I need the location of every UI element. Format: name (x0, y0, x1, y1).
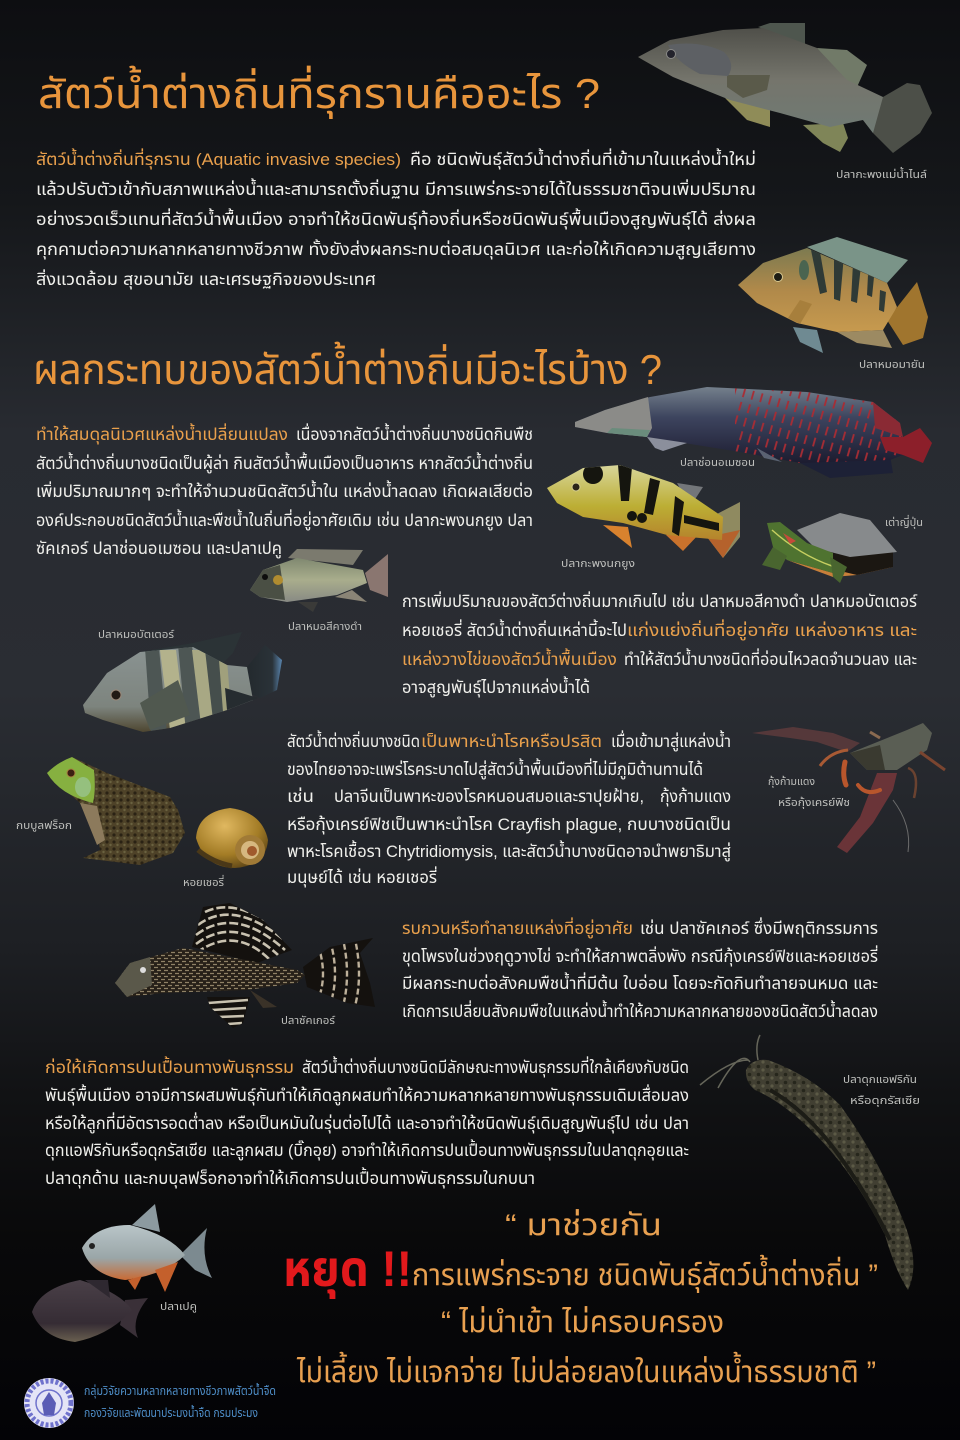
text block: disease carriers: เช่น (287, 788, 314, 806)
label: peacock bass: ปลากะพงนกยูง (561, 558, 635, 570)
icon: crayfish (752, 723, 945, 853)
title: what are invasive aquatic animals: สัตว์น้ำต่างถิ่นที่รุกรานคืออะไร ? (38, 65, 600, 119)
icon: arapaima (575, 387, 932, 478)
label: bullfrog: กบบูลฟร็อก (16, 820, 72, 832)
text block: competition: การเพิ่มปริมาณของสัตว์ต่างถิ่นมากเกินไป เช่น ปลาหมอสีคางดำ ปลาหมอบัตเตอร์ (402, 591, 918, 611)
icon: pacu pair (32, 1204, 212, 1342)
label: African catfish (843, 1074, 920, 1107)
label: African catfish: ปลาดุกแอฟริกัน (843, 1074, 917, 1086)
text block: definition: อย่างรวดเร็วแทนที่สัตว์น้ำพื้นเมือง อาจทำให้ชนิดพันธุ์ท้องถิ่นหรือชนิดพันธุ์พื้นเมืองสูญพันธุ์ได้ ส่งผล (36, 208, 756, 229)
icon: bullfrog (47, 757, 185, 865)
callout: stop the spread: การแพร่กระจาย ชนิดพันธุ์สัตว์น้ำต่างถิ่น ” (412, 1254, 878, 1293)
icon: barramundi fish (638, 23, 932, 153)
label: crayfish: หรือกุ้งเครย์ฟิช (778, 797, 850, 809)
text block: genetic contamination: ดุกแอฟริกันหรือดุกรัสเซีย และลูกผสม (บิ๊กอุย) อาจทำให้เกิดการปนเปื้อนทางพันธุกรรมในปลาดุกอุยและ (45, 1139, 689, 1160)
text block: habitat destruction (402, 917, 878, 1021)
callout: stop the spread: ไม่เลี้ยง ไม่แจกจ่าย ไม่ปล่อยลงในแหล่งน้ำธรรมชาติ ” (296, 1351, 876, 1389)
icon: department seal (24, 1378, 74, 1428)
label: suckermouth catfish: ปลาซัคเกอร์ (281, 1015, 336, 1027)
text block: competition: แก่งแย่งถิ่นที่อยู่อาศัย แหล่งอาหาร และ (627, 619, 917, 640)
text block: disease carriers: ของไทยอาจจะแพร่โรคระบาดไปสู่สัตว์น้ำพื้นเมืองที่ไม่มีภูมิต้านทานได้ (287, 758, 703, 779)
text block: disease carriers: หรือกุ้งเครย์ฟิชเป็นพาหะนำโรค Crayfish plague, กบบางชนิดเป็น (287, 816, 731, 834)
label: mayan cichlid: ปลาหมอมายัน (859, 359, 925, 371)
callout: stop the spread: “ มาช่วยกัน (505, 1209, 662, 1242)
label: crayfish (768, 776, 850, 809)
text block: disease carriers: เมื่อเข้ามาสู่แหล่งน้ำ (611, 730, 731, 751)
label: blackchin tilapia: ปลาหมอสีคางดำ (288, 621, 362, 633)
text block: genetic contamination: ก่อให้เกิดการปนเปื้อนทางพันธุกรรม (45, 1056, 294, 1077)
text block: organisation: กองวิจัยและพัฒนาประมงน้ำจืด กรมประมง (84, 1404, 258, 1420)
text block: ecosystem balance: สัตว์น้ำต่างถิ่นบางชนิดเป็นผู้ล่า กินสัตว์น้ำพื้นเมืองเป็นอาหาร หากสัตว์น้ำต่างถิ่น (36, 452, 533, 473)
text block: habitat destruction: มีผลกระทบต่อสังคมพืชน้ำที่มีต้น ใบอ่อน โดยจะกัดกินทำลายจนหมด และ (402, 972, 878, 993)
text block: competition: ทำให้สัตว์น้ำบางชนิดที่อ่อนไหวลดจำนวนลง และ (624, 648, 917, 669)
label: barramundi: ปลากะพงแม่น้ำไนล์ (836, 166, 927, 181)
text block: definition: แล้วปรับตัวเข้ากับสภาพแหล่งน้ำและสามารถตั้งถิ่นฐาน มีการแพร่กระจายได้ในธรรมชาติจนเพิ่มปริมาณ (36, 178, 756, 199)
icon: peacock bass (547, 464, 740, 558)
text block: disease carriers: ปลาจีนเป็นพาหะของโรคหนอนสมอและราปุยฝ้าย, (334, 788, 644, 806)
text block: ecosystem balance: เพิ่มปริมาณมากๆ จะทำให้จำนวนชนิดสัตว์น้ำใน แหล่งน้ำลดลง เกิดผลเสียต่อ (36, 480, 533, 501)
label: Nile tilapia: ปลาหมอบัตเตอร์ (98, 629, 175, 641)
icon: mayan cichlid (738, 237, 928, 353)
label: pacu: ปลาเปคู (160, 1301, 197, 1313)
icon: African catfish (700, 1035, 913, 1290)
callout: stop the spread: หยุด !! (283, 1241, 412, 1299)
text block: organisation: กลุ่มวิจัยความหลากหลายทางชีวภาพสัตว์น้ำจืด (84, 1382, 276, 1398)
text block: competition: อาจสูญพันธุ์ไปจากแหล่งน้ำได้ (402, 676, 590, 697)
text block: ecosystem balance: ทำให้สมดุลนิเวศแหล่งน้ำเปลี่ยนแปลง (36, 423, 288, 444)
text block: disease carriers: พาหะโรคเชื้อรา Chytridiomysis, และสัตว์น้ำบางชนิดอาจนำพยาธิมาสู่ (287, 840, 731, 861)
text block: definition: สิ่งแวดล้อม สุขอนามัย และเศรษฐกิจของประเทศ (36, 269, 376, 289)
icon: suckermouth catfish (115, 903, 375, 1028)
label: snail: หอยเชอรี่ (183, 874, 225, 889)
text block: competition: แหล่งวางไข่ของสัตว์น้ำพื้นเมือง (402, 648, 617, 669)
text block: disease carriers: กุ้งก้ามแดง (660, 788, 731, 806)
callout: stop the spread: “ ไม่นำเข้า ไม่ครอบครอง (441, 1306, 724, 1339)
icon: red-eared slider turtle (762, 513, 897, 583)
label: turtle: เต่าญี่ปุ่น (885, 514, 923, 529)
icon: apple snail (196, 808, 268, 868)
text block: definition: สัตว์น้ำต่างถิ่นที่รุกราน (Aquatic invasive species) (36, 148, 401, 169)
text block: competition: หอยเชอรี่ สัตว์น้ำต่างถิ่นเหล่านี้จะไป (402, 619, 627, 640)
label: African catfish: หรือดุกรัสเซีย (850, 1095, 920, 1107)
text block: disease carriers: สัตว์น้ำต่างถิ่นบางชนิด (287, 730, 420, 751)
text block: disease carriers: มนุษย์ได้ เช่น หอยเชอรี่ (287, 866, 437, 887)
text block: ecosystem balance (36, 423, 533, 558)
text block: genetic contamination (45, 1056, 689, 1188)
text block: competition (402, 591, 918, 697)
text block: definition (36, 148, 756, 289)
text block: habitat destruction: ขุดโพรงในช่วงฤดูวางไข่ จะทำให้สภาพตลิ่งพัง กรณีกุ้งเครย์ฟิชและหอยเชอรี่ (402, 945, 878, 966)
text block: definition: คือ ชนิดพันธุ์สัตว์น้ำต่างถิ่นที่เข้ามาในแหล่งน้ำใหม่ (410, 148, 756, 169)
heading: impacts: ผลกระทบของสัตว์น้ำต่างถิ่นมีอะไรบ้าง ? (33, 341, 662, 393)
text block: genetic contamination: หรือให้ลูกที่มีอัตรารอดต่ำลง หรือเป็นหมันในรุ่นต่อไปได้ และอาจทำให้ชนิดพันธุ์เดิมสูญพันธุ์ไป เช่น ปลา (45, 1112, 689, 1133)
text block: organisation (84, 1382, 276, 1420)
text block: ecosystem balance: องค์ประกอบชนิดสัตว์น้ำและพืชน้ำในถิ่นที่อยู่อาศัยเดิม เช่น ปลากะพงนกยูง ปลา (36, 509, 533, 530)
icon: blackchin tilapia (250, 549, 388, 612)
icon: Nile tilapia (83, 647, 282, 732)
text block: habitat destruction: รบกวนหรือทำลายแหล่งที่อยู่อาศัย (402, 917, 633, 938)
text block: habitat destruction: เช่น ปลาซัคเกอร์ ซึ่งมีพฤติกรรมการ (640, 917, 878, 938)
text block: definition: คุกคามต่อความหลากหลายทางชีวภาพ ทั้งยังส่งผลกระทบต่อสมดุลนิเวศ และก่อให้เกิดความสูญเสียทาง (36, 239, 756, 259)
text block: genetic contamination: สัตว์น้ำต่างถิ่นบางชนิดมีลักษณะทางพันธุกรรมที่ใกล้เคียงกับชนิด (302, 1056, 689, 1077)
text block: ecosystem balance: ซัคเกอร์ ปลาช่อนอเมซอน และปลาเปคู (36, 540, 282, 558)
callout: stop the spread (283, 1209, 878, 1389)
label: arapaima: ปลาช่อนอเมซอน (680, 456, 755, 469)
text block: disease carriers: เป็นพาหะนำโรคหรือปรสิต (421, 733, 602, 751)
label: crayfish: กุ้งก้ามแดง (768, 776, 815, 788)
text block: genetic contamination: พันธุ์พื้นเมือง อาจมีการผสมพันธุ์กันทำให้เกิดลูกผสมทำให้ความหลากหลายทางพันธุกรรมเดิมเสื่อมลง (45, 1084, 689, 1105)
text block: ecosystem balance: เนื่องจากสัตว์น้ำต่างถิ่นบางชนิดกินพืช (296, 423, 533, 444)
text block: genetic contamination: ปลาดุกด้าน และกบบุลฟร็อกอาจทำให้เกิดการปนเปื้อนทางพันธุกรรมในกบนา (45, 1167, 535, 1188)
text block: habitat destruction: เกิดการเปลี่ยนสังคมพืชในแหล่งน้ำทำให้ความหลากหลายของชนิดสัตว์น้ำลดลง (402, 1000, 878, 1021)
text block: disease carriers (287, 730, 731, 887)
